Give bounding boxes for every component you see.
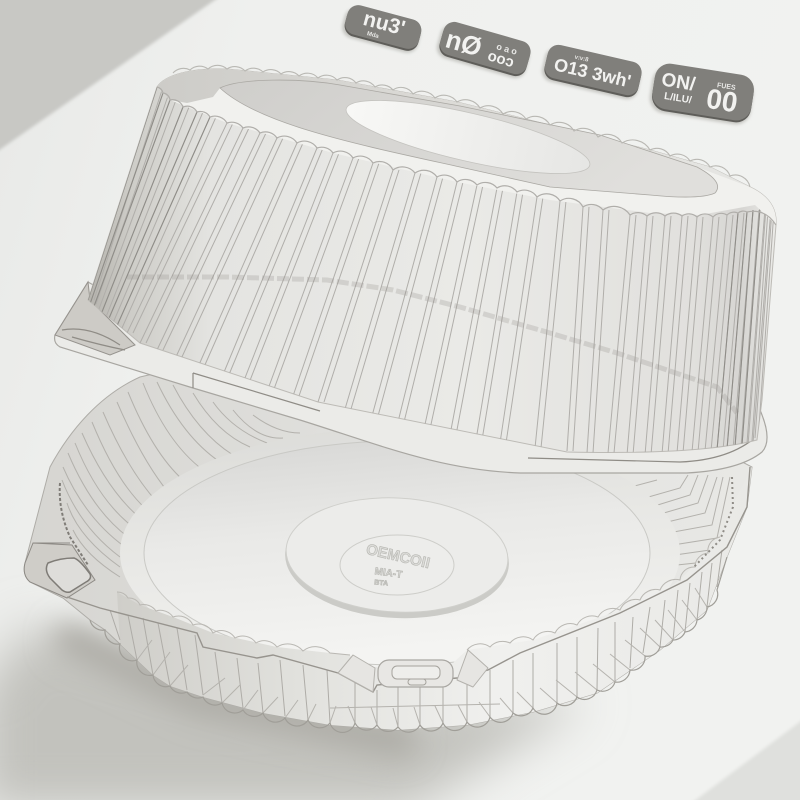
badge 2: ooɔ <box>486 47 516 71</box>
embossed label: MIA-T <box>374 566 403 581</box>
lid: top dome <box>55 65 778 473</box>
see-through tray edge <box>127 277 737 413</box>
flange corner <box>55 282 135 355</box>
lid ribs and highlights <box>88 87 778 455</box>
top back rim band <box>157 69 750 187</box>
lid top surface <box>157 69 776 225</box>
lid flange <box>55 282 767 473</box>
badge 3: v:v:8 <box>574 55 590 64</box>
tray inner radial ribs <box>62 382 730 577</box>
tray wall rib lines <box>110 550 722 727</box>
front hinge tab <box>338 650 488 692</box>
badge 1: Mda <box>366 31 380 40</box>
tray right bead line <box>693 477 733 568</box>
badge 2 <box>434 19 533 81</box>
front scalloped edge <box>157 87 776 225</box>
badge 4: L/ILU/ <box>663 91 693 106</box>
tray inner scalloped edge <box>117 537 720 655</box>
badge 4: FUES <box>716 82 736 92</box>
tray wall chevron ticks <box>137 588 707 727</box>
darker edge ribs <box>88 87 760 450</box>
tray rim line <box>67 467 750 692</box>
tray bottom scalloped edge <box>90 557 727 732</box>
top inner grey panel <box>220 80 718 197</box>
flange hinge notch <box>62 329 757 462</box>
tray outer body <box>24 370 752 730</box>
tray corner with handle <box>24 483 95 598</box>
top centre highlight <box>341 85 595 189</box>
badge 4: ON/ <box>660 69 697 96</box>
badge 4 <box>648 61 756 127</box>
badge 4: 00 <box>704 83 740 118</box>
embossed label: OEMCOII <box>364 541 432 572</box>
badge 1 <box>340 2 424 55</box>
badge 2: o a o <box>495 41 519 57</box>
tray front wall <box>117 467 752 730</box>
shadow under tray <box>0 625 590 800</box>
badge row <box>340 2 756 127</box>
raised centre disc <box>282 492 512 624</box>
badge 1: nu3' <box>361 7 408 40</box>
badge 3: O13 3wh' <box>552 54 633 92</box>
badge 3 <box>540 42 644 101</box>
tray: bottom container <box>24 370 752 732</box>
tray flat ring <box>120 428 680 678</box>
embossed label <box>364 541 432 588</box>
badge 2: nØ <box>442 24 485 62</box>
lid dome body <box>88 69 776 452</box>
embossed label: BTA <box>374 579 388 588</box>
back scalloped edge <box>173 65 750 187</box>
tray base disc <box>144 441 650 665</box>
